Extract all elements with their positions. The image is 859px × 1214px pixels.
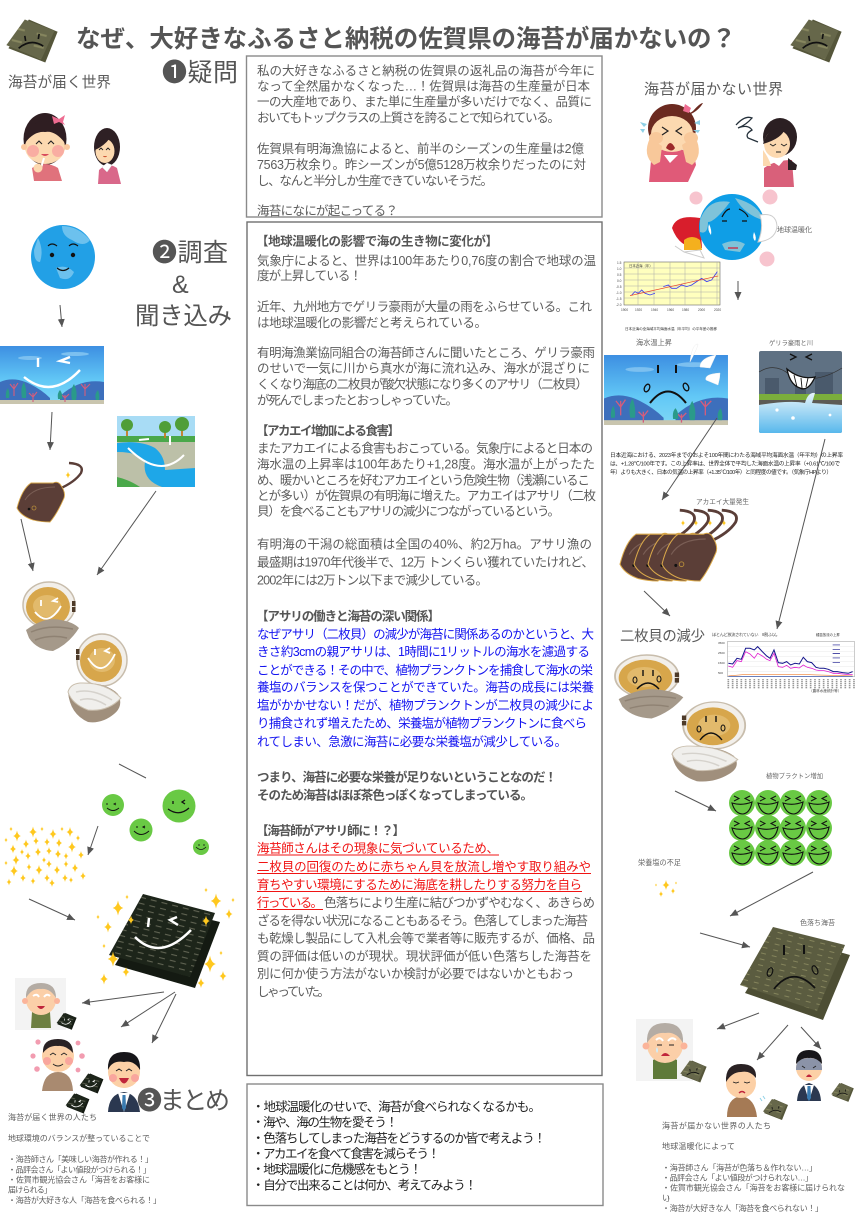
label: global warming: 地球温暖化 — [777, 225, 812, 234]
chart: sea surface temperature trend: -1.0 — [616, 291, 622, 295]
chart: sea surface temperature trend: 日本近海（年） — [629, 263, 653, 268]
text block: global warming: が死んでしまったとおっしゃっていた。 — [257, 392, 458, 408]
panel: summary — [247, 1084, 603, 1206]
chart: sea surface temperature trend: 1940 — [651, 308, 658, 312]
illustration: happy clam 1 — [23, 582, 79, 651]
illustration: happy girl — [21, 113, 70, 181]
icon: small sad nori with grandfather — [680, 1060, 707, 1083]
text block: nori farmers: 色落ちにより生産に結びつかずやむなく、あきらめ — [324, 896, 595, 910]
chart: clam harvest decline: 500 — [718, 671, 723, 675]
illustration: river — [117, 416, 195, 487]
chart: sea surface temperature trend: 1900 — [621, 308, 628, 312]
heading: 2 research and interviews: & — [172, 271, 189, 299]
chart: clam harvest decline: 種苗放流の上昇 — [816, 632, 840, 637]
heading: 1 question: ❶疑問 — [162, 59, 238, 87]
text block: global warming — [257, 253, 596, 408]
panel: question: 7563万枚余り。昨シーズンが5億5128万枚余りだったのに対 — [257, 157, 586, 172]
icon: small sad nori with businessman — [831, 1083, 854, 1102]
text block: global warming: 有明海漁業協同組合の海苔師さんに聞いたところ、ゲリラ豪雨 — [257, 345, 595, 360]
arrow — [662, 418, 717, 500]
panel: question: おいてもトップクラスの上質さを誇ることで知られている。 — [257, 110, 560, 125]
text block: sea temperature note: は、+1.28℃/100年です。この上昇率は、世界全体で平均した海面水温の上昇率（+0.61℃/100で — [610, 460, 840, 468]
illustration: happy man eating — [30, 1039, 85, 1091]
caption: people of happy world — [8, 1112, 161, 1205]
illustration: happy stingray — [17, 463, 82, 522]
label: stingray outbreak: アカエイ大量発生 — [696, 497, 749, 506]
chart: sea surface temperature trend: 1960 — [667, 308, 674, 312]
illustration: crying girl — [640, 103, 703, 182]
chart: sea surface temperature trend — [616, 261, 721, 331]
text block: conclusion bold: そのため海苔はほぼ茶色っぽくなってしまっている。 — [257, 788, 533, 802]
text block: conclusion bold — [257, 770, 557, 802]
panel: summary: ・色落ちしてしまった海苔をどうするのか皆で考えよう！ — [252, 1132, 546, 1146]
illustration: worried woman — [736, 117, 797, 187]
arrow — [737, 281, 739, 300]
illustration: sad man — [726, 1064, 765, 1117]
text block: red underlined: 二枚貝の回復のために赤ちゃん貝を放流し増やす取り組みや — [257, 859, 591, 874]
illustration: happy plankton — [102, 790, 209, 855]
text block: nori farmers: も乾燥し製品にして入札会等で業者等に販売するが、価格、品 — [257, 930, 595, 946]
label: sea temperature rise: 海水温上昇 — [636, 338, 672, 347]
text block: clams and nori in blue — [257, 626, 594, 749]
text block: stingray: とが多い）が佐賀県の有明海に増えた。アカエイはアサリ（二枚 — [257, 488, 596, 503]
text block: clams and nori in blue: り捕食されず増えたため、栄養塩が植物プランクトンに食べら — [257, 716, 587, 730]
label: plankton increase: 植物プラクトン増加 — [766, 771, 823, 780]
text block: red underlined: 育ちやすい環境にするために海底を耕したりする努力を自ら — [257, 877, 582, 892]
text block: red underlined: 海苔師さんはその現象に気づいているため、 — [257, 840, 499, 856]
panel: question: 海苔になにが起こってる？ — [257, 203, 398, 218]
arrow — [777, 439, 825, 629]
illustration: plankton grid — [729, 790, 832, 866]
chart: clam harvest decline — [712, 631, 855, 693]
subheading: stingray: 【アカエイ増加による食害】 — [256, 423, 400, 438]
text block: conclusion bold: つまり、海苔に必要な栄養が足りないということなのだ！ — [257, 770, 557, 784]
caption: people of sad world: ・品評会さん「よい値段がつけられない…」 — [662, 1172, 813, 1182]
text block: nori farmers — [257, 896, 595, 999]
text block: stingray: またアカエイによる食害もおこっている。気象庁によると日本の — [257, 440, 593, 456]
text block: stingray: 貝）を食べることもアサリの減少につながっているという。 — [257, 504, 560, 518]
text block: global warming: 度が上昇している！ — [257, 268, 362, 283]
arrow — [88, 826, 98, 855]
icon: small sad nori with man — [763, 1099, 788, 1120]
chart: sea surface temperature trend: 2000 — [698, 308, 705, 312]
illustration: rainstorm and river — [759, 351, 842, 433]
chart: sea surface temperature trend: -0.5 — [616, 285, 622, 289]
chart: sea surface temperature trend: 0.0 — [617, 279, 622, 283]
illustration: happy nori — [96, 888, 235, 988]
illustration: happy grandfather — [15, 978, 66, 1030]
caption: people of happy world: ・品評会さん「よい値段がつけられる！」 — [8, 1164, 151, 1174]
illustration: sad grandfather — [636, 1019, 693, 1081]
illustration: happy ocean — [0, 346, 104, 404]
illustration: overheated earth — [672, 190, 778, 266]
text block: nori farmers: 別に何か使う方法がないか検討が必要ではないかともおっ — [257, 966, 574, 981]
text block: nori farmers: しゃっていた。 — [257, 985, 330, 999]
label: discoloured nori: 色落ち海苔 — [800, 918, 835, 927]
text block: clams and nori in blue: きさ約3cmの親アサリは、1時間に1リットルの海水を濾過する — [257, 644, 590, 659]
panel: summary: ・地球温暖化に危機感をもとう！ — [252, 1162, 422, 1176]
arrow — [29, 899, 75, 920]
arrow — [717, 1013, 759, 1029]
heading: world where nori arrives: 海苔が届く世界 — [8, 74, 111, 91]
chart: sea surface temperature trend: -2.0 — [616, 303, 622, 307]
text block: sea temperature note: 年）よりも大きく、日本の気温の上昇率（+1.35℃/100年）と同程度の値です。（気象庁HPより） — [610, 468, 832, 476]
text block: stingray: 有明海の干潟の総面積は全国の40%、約2万ha。アサリ漁の — [257, 536, 592, 552]
subheading: nori farmers: 【海苔師がアサリ師に！？】 — [256, 823, 405, 838]
icon: small nori pair — [66, 1074, 103, 1113]
arrow — [50, 412, 52, 450]
arrow — [82, 992, 164, 1003]
illustration: happy clam 2 — [68, 634, 127, 722]
chart: sea surface temperature trend: 日本近海の全海域平均海面水温（年平均）の平年差の推移 — [625, 326, 717, 331]
arrow — [700, 933, 750, 947]
arrow — [675, 791, 716, 811]
text block: stingray: 最盛期は1970年代後半で、12万 トンくらい獲れていたけれど、 — [257, 554, 594, 570]
text block: clams and nori in blue: なぜアサリ（二枚貝）の減少が海苔に関係あるのかというと、大 — [257, 626, 594, 642]
panel: question — [246, 56, 602, 218]
chart: sea surface temperature trend: 1.5 — [617, 261, 622, 265]
panel: question: し、なんと半分しか生産できていないそうだ。 — [257, 174, 493, 188]
heading: 2 research and interviews: 聞き込み — [135, 303, 232, 330]
chart: sea surface temperature trend: -1.5 — [616, 297, 622, 301]
text block: clams and nori in blue: れてしまい、急激に海苔に必要な栄養塩が減少している。 — [257, 734, 567, 749]
icon: small sparkles — [655, 880, 677, 897]
caption: people of happy world: 地球環境のバランスが整っていることで — [8, 1133, 150, 1143]
text block: clams and nori in blue: ことができる！その中で、植物プランクトンを捕食して海水の栄 — [257, 662, 593, 678]
chart: clam harvest decline: 2500 — [718, 651, 725, 655]
caption: people of happy world: 届けられる」 — [8, 1186, 52, 1194]
text block: global warming: のせいで一気に川から真水が海に流れ込み、海水が混ざりに — [257, 360, 590, 376]
chart: clam harvest decline: ほとんど放流されていない 8割ふ以。 — [712, 631, 780, 638]
panel: summary: ・地球温暖化のせいで、海苔が食べられなくなるかも。 — [252, 1099, 541, 1114]
heading: world where nori does not arrive: 海苔が届かない世界 — [644, 81, 783, 98]
caption: people of sad world: ・海苔師さん「海苔が色落ち＆作れない…」 — [662, 1162, 817, 1172]
chart: sea surface temperature trend: 1920 — [635, 308, 642, 312]
illustration: happy businessman — [108, 1052, 140, 1112]
caption: people of sad world — [662, 1120, 845, 1213]
icon: sad nori top right — [790, 20, 842, 63]
text block: red underlined: 行っている。 — [257, 896, 323, 910]
arrow — [757, 1025, 788, 1060]
chart: sea surface temperature trend: 2020 — [714, 308, 721, 312]
text block: global warming: 気象庁によると、世界は100年あたり0,76度の割合で地球の温 — [257, 253, 596, 268]
arrow — [644, 591, 670, 616]
arrow — [801, 1027, 821, 1049]
arrow — [21, 519, 33, 571]
text block: nori farmers: ざるを得ない状況になることもあるそう。色落してしまった海苔 — [257, 913, 588, 928]
caption: people of sad world: ・海苔が大好きな人「海苔を食べられない！」 — [662, 1203, 823, 1213]
heading: clam decline: 二枚貝の減少 — [620, 628, 705, 645]
label: guerrilla rainstorm and river: ゲリラ豪雨と川 — [769, 338, 813, 347]
chart: clam harvest decline: 3500 — [718, 641, 725, 645]
chart: clam harvest decline: 1500 — [718, 661, 725, 665]
caption: people of sad world: い」 — [662, 1194, 674, 1202]
illustration: sad businessman — [796, 1050, 822, 1101]
icon: small nori with grandfather — [57, 1013, 77, 1030]
heading: 2 research and interviews: ❷調査 — [152, 239, 228, 267]
text block: global warming: 近年、九州地方でゲリラ豪雨が大量の雨をふらせている。これ — [257, 299, 592, 314]
panel: question: 一の大産地であり、また単に生産量が多いだけでなく、品質に — [257, 94, 592, 109]
label: nutrient shortage: 栄養塩の不足 — [638, 858, 681, 867]
chart: clam harvest decline: （農林水産統計等） — [809, 688, 841, 693]
panel: question: 佐賀県有明海漁協によると、前半のシーズンの生産量は2億 — [257, 141, 584, 156]
arrow — [60, 305, 62, 327]
caption: people of sad world: 海苔が届かない世界の人たち — [662, 1120, 771, 1130]
caption: people of happy world: ・佐賀市観光協会さん「海苔をお客様に — [8, 1174, 150, 1184]
caption: people of happy world: 海苔が届く世界の人たち — [8, 1112, 97, 1122]
panel: question: 私の大好きなふるさと納税の佐賀県の返礼品の海苔が今年に — [257, 63, 595, 78]
text block: global warming: くくなり海底の二枚貝が酸欠状態になり多くのアサリ（二枚貝） — [257, 376, 588, 392]
illustration: sad clam 1 — [615, 655, 683, 718]
subheading: clams and nori: 【アサリの働きと海苔の深い関係】 — [256, 608, 440, 624]
text block: nori farmers: 質の評価は低いのが現状。現状評価が低い色落ちした海苔を — [257, 948, 592, 964]
chart: sea surface temperature trend: 1980 — [682, 308, 689, 312]
panel: research — [247, 222, 602, 1076]
heading: 3 summary: ❸まとめ — [137, 1087, 230, 1115]
text block: clams and nori in blue: 養塩のバランスを保つことができていた。海苔の成長には栄養 — [257, 680, 594, 694]
text block: sea temperature note — [610, 451, 843, 476]
text block: stingray — [257, 440, 596, 588]
illustration: happy earth — [31, 225, 95, 289]
text block: sea temperature note: 日本近海における、2023年までのおよそ100年間にわたる海域平均海面水温（年平均）の上昇率 — [610, 451, 843, 459]
caption: people of sad world: 地球温暖化によって — [662, 1141, 735, 1151]
illustration: sad clam 2 — [672, 702, 745, 782]
caption: people of happy world: ・海苔が大好きな人「海苔を食べられる！」 — [8, 1195, 161, 1205]
illustration: sad nori — [740, 927, 850, 1020]
arrow — [152, 994, 176, 1043]
line — [119, 764, 146, 778]
illustration: nutrient sparkles — [4, 826, 86, 887]
illustration: stingray group — [620, 510, 737, 581]
chart: sea surface temperature trend: 1.0 — [617, 267, 622, 271]
caption: people of sad world: ・佐賀市観光協会さん「海苔をお客様に届けられな — [662, 1182, 845, 1192]
arrow — [121, 992, 175, 1027]
icon: sad nori top left — [6, 20, 58, 63]
illustration: woman — [94, 128, 121, 184]
text block: stingray: 2002年には2万トン以下まで減少している。 — [257, 572, 488, 588]
caption: people of happy world: ・海苔師さん「美味しい海苔が作れる！」 — [8, 1154, 153, 1164]
chart: sea surface temperature trend: 0.5 — [617, 273, 622, 277]
text block: global warming: は地球温暖化の影響だと考えられている。 — [257, 315, 487, 330]
arrow — [97, 491, 156, 575]
text block: stingray: め、暖かいところを好むアカエイという危険生物（浅瀬にいるこ — [257, 474, 590, 488]
panel: summary: ・自分で出来ることは何か、考えてみよう！ — [252, 1178, 477, 1192]
panel: summary: ・アカエイを食べて食害を減らそう！ — [252, 1146, 440, 1161]
panel: question: なって全然届かなくなった…！佐賀県は海苔の生産量が日本 — [257, 78, 590, 94]
arrow — [730, 872, 813, 916]
text block: red underlined — [257, 840, 591, 910]
illustration: sad ocean — [604, 344, 728, 425]
text block: stingray: 海水温の上昇率は100年あたり+1,28度。海水温が上がったた — [257, 456, 595, 472]
title: なぜ、大好きなふるさと納税の佐賀県の海苔が届かないの？ — [76, 24, 736, 53]
panel: summary: ・海や、海の生物を愛そう！ — [252, 1116, 398, 1130]
text block: clams and nori in blue: 塩がかかせない！だが、植物プランクトンが二枚貝の減少によ — [257, 698, 594, 712]
subheading: global warming: 【地球温暖化の影響で海の生き物に変化が】 — [256, 234, 498, 248]
heading: 2 research and interviews — [135, 239, 232, 330]
